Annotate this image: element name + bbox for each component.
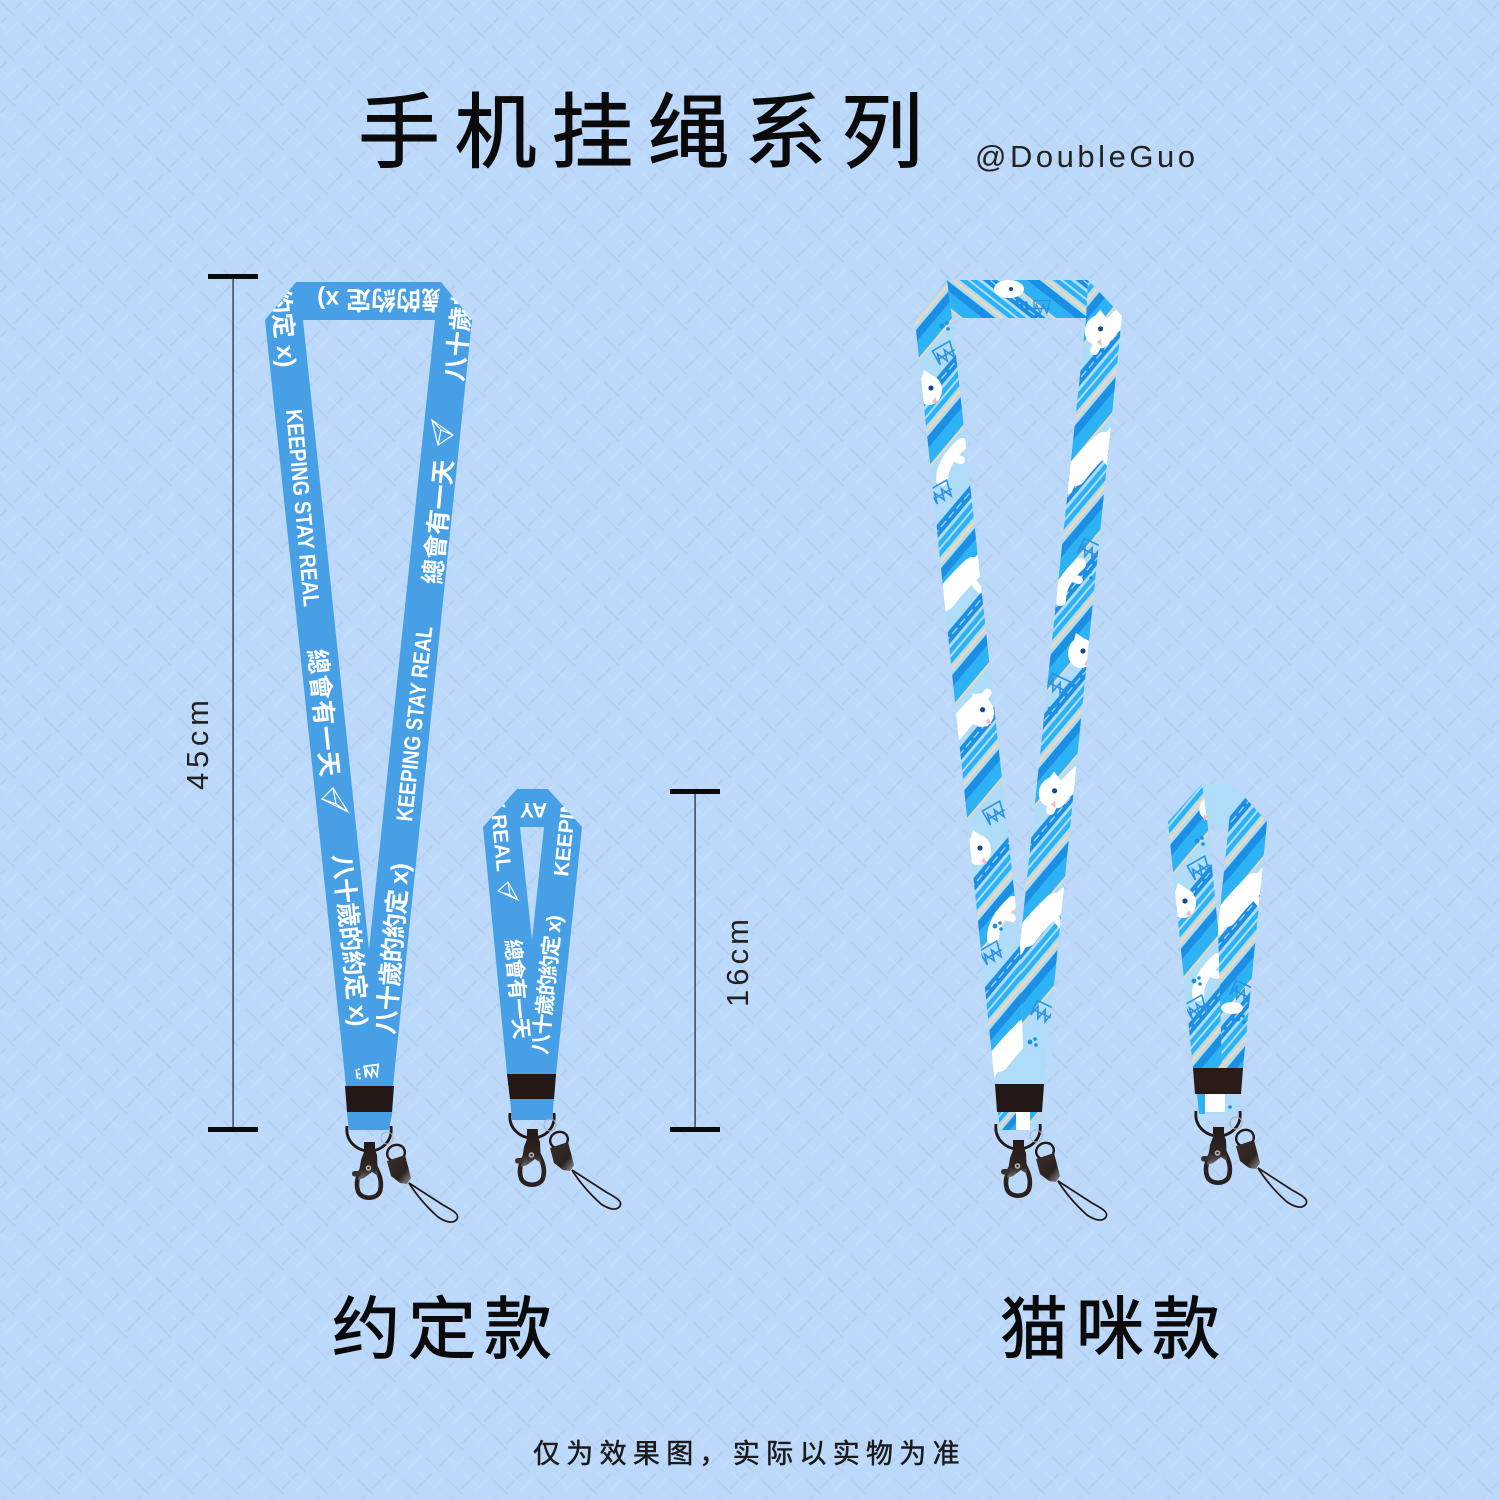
black crimp band	[995, 1084, 1044, 1112]
hardware clasp and strap	[510, 1113, 621, 1209]
ribbon text: 總會有一天	[500, 938, 533, 1040]
ribbon text: STAY	[520, 798, 573, 821]
left strap print	[915, 280, 1023, 1078]
ribbon tail below band	[998, 1112, 1041, 1130]
lanyard: cat style, long	[915, 280, 1122, 1221]
icon: paper plane right	[432, 420, 453, 445]
ribbon tail below band	[1197, 1094, 1240, 1114]
footnote: 仅为效果图，实际以实物为准	[533, 1439, 966, 1469]
left strap print	[1168, 784, 1222, 1068]
ribbon text: right strap: KEEPING STAY REAL	[391, 625, 437, 823]
dimension: 45cm	[180, 274, 258, 1132]
right strap print	[1218, 798, 1267, 1068]
ribbon text	[492, 803, 574, 1054]
black crimp band	[345, 1086, 394, 1112]
title: 手机挂绳系列	[358, 88, 938, 179]
ribbon text: 八十歲的約定 x)	[528, 914, 567, 1056]
dimension: 16cm: 16cm	[720, 919, 755, 1007]
lanyard: promise style, short	[483, 781, 621, 1209]
icon: paper plane left	[322, 788, 348, 812]
ribbon text: top: 八十歲的約定 x)	[317, 285, 496, 313]
ribbon text: left strap: 總會有一天	[302, 648, 343, 778]
ribbon text: right strap: 八十歲的約	[441, 255, 482, 383]
ribbon text: right strap: 八十歲的約定 x)	[372, 862, 415, 1036]
ribbon text: Y REAL	[485, 794, 515, 873]
top print	[947, 280, 1088, 318]
ribbon base	[915, 280, 1122, 1084]
ribbon text: left strap	[272, 291, 369, 1026]
black crimp band	[507, 1074, 556, 1099]
icon: paper plane	[498, 882, 518, 900]
black crimp band	[1193, 1068, 1243, 1094]
dimension: 45cm: 45cm	[180, 700, 215, 790]
label: cat style: 猫咪款	[1000, 1292, 1228, 1368]
ribbon	[483, 789, 582, 1120]
label: promise style: 约定款	[332, 1292, 560, 1368]
ribbon	[265, 282, 472, 1130]
ribbon text: KEEPING	[550, 781, 583, 878]
ribbon text: right strap	[376, 296, 472, 1034]
hardware clasp and strap	[996, 1124, 1107, 1220]
ribbon text: right strap: 總會有一天	[419, 458, 459, 586]
ribbon text: left strap: 的約定 x)	[262, 262, 301, 369]
icon: crown mark	[356, 1064, 380, 1079]
ribbon text: left strap: KEEPING STAY REAL	[281, 408, 325, 608]
hardware clasp and strap	[347, 1126, 458, 1222]
lanyard: promise style, long	[265, 282, 472, 1223]
ribbon base	[1168, 784, 1267, 1068]
author credit: @DoubleGuo	[975, 139, 1195, 174]
dimension: 16cm	[670, 789, 755, 1132]
ribbon text: left strap: 八十歲的約定 x)	[327, 853, 373, 1028]
right strap print	[1020, 280, 1122, 1047]
hardware clasp and strap	[1196, 1111, 1307, 1207]
lanyard: cat style, short	[1168, 784, 1308, 1208]
